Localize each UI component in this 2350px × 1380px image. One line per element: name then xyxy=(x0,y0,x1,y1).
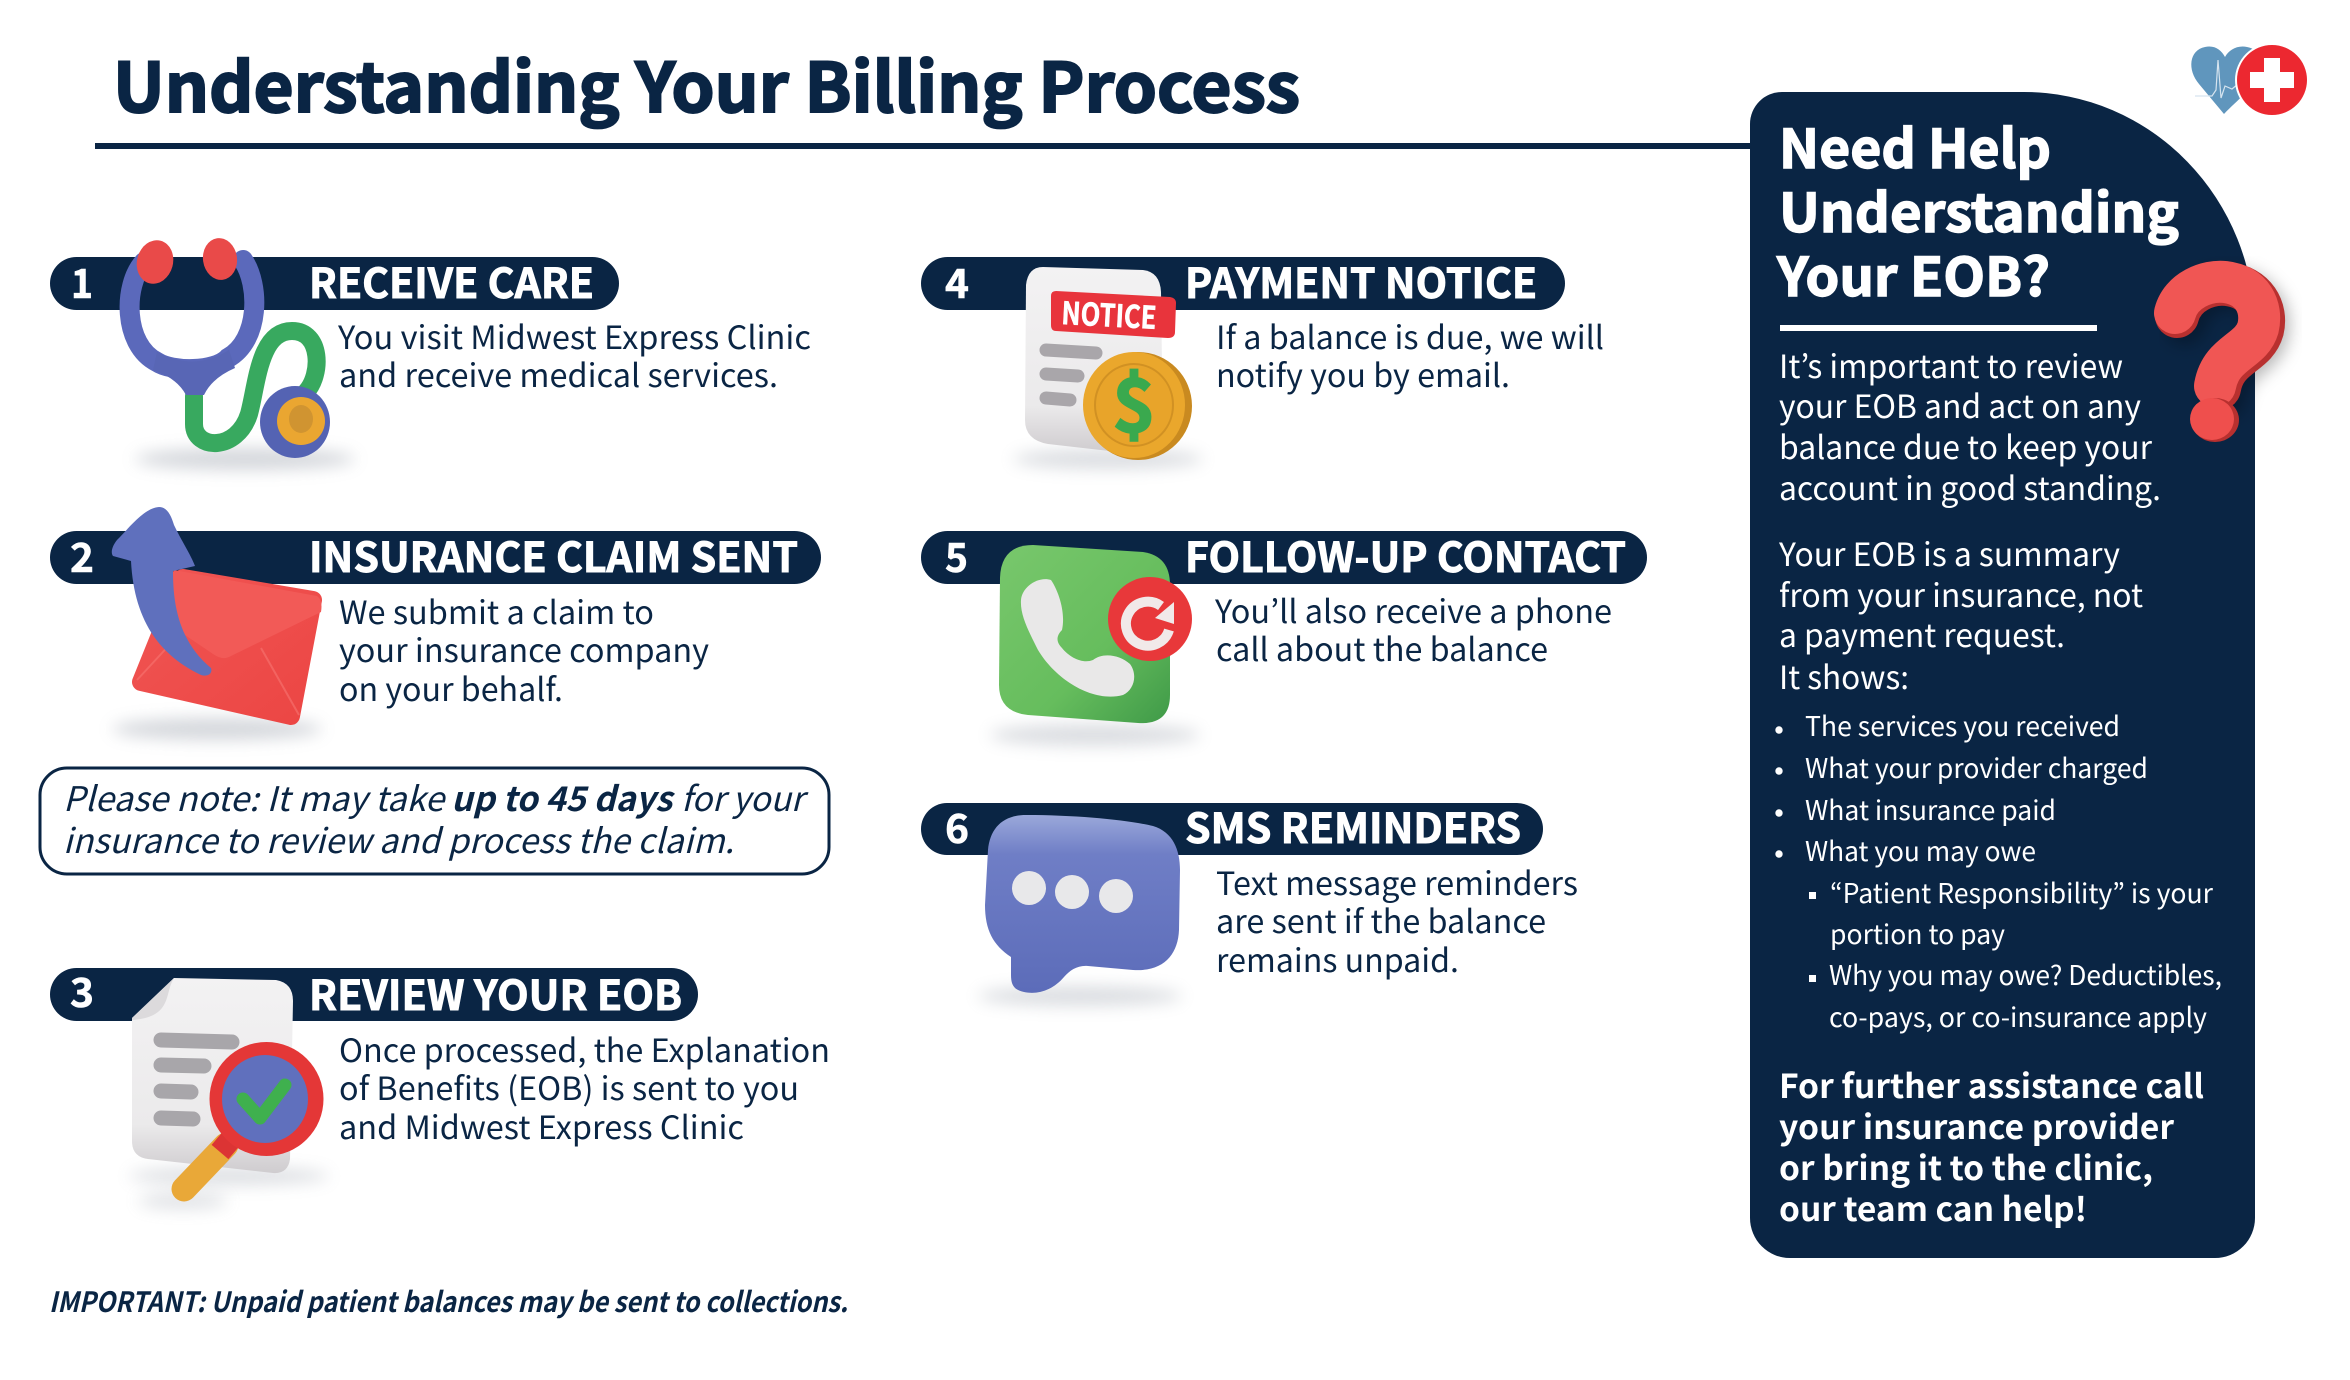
step 5 heading: FOLLOW-UP CONTACT xyxy=(1185,524,1626,584)
panel background xyxy=(1750,92,2255,1258)
step 5 number: 5 xyxy=(945,526,968,584)
step 2: insurance claim sent xyxy=(50,507,821,740)
panel EOB paragraph xyxy=(1778,530,2143,699)
icon: notice with coin: NOTICE xyxy=(1061,288,1158,338)
step 4: payment notice xyxy=(921,250,1604,469)
panel closing call to action: your insurance provider xyxy=(1779,1101,2175,1149)
panel bullet list: What insurance paid xyxy=(1805,789,2056,828)
title rule xyxy=(95,143,1760,149)
step 3: review your eob xyxy=(50,961,830,1209)
panel intro paragraph: balance due to keep your xyxy=(1779,423,2153,469)
panel bullet list: portion to pay xyxy=(1830,913,2005,952)
panel closing call to action xyxy=(1779,1060,2204,1231)
panel heading underline xyxy=(1780,325,2097,331)
step 3 description xyxy=(339,1026,830,1149)
step 2 description: on your behalf. xyxy=(339,665,563,711)
panel bullet list: What you may owe xyxy=(1805,830,2036,869)
panel bullet list: “Patient Responsibility” is your xyxy=(1830,872,2214,911)
step 3 description: of Benefits (EOB) is sent to you xyxy=(339,1064,799,1110)
step 3 heading bar xyxy=(50,968,698,1021)
step 4 description: notify you by email. xyxy=(1216,351,1510,397)
step 2 number: 2 xyxy=(70,526,94,584)
step 2 heading: INSURANCE CLAIM SENT xyxy=(309,524,798,584)
panel EOB paragraph: a payment request. xyxy=(1779,611,2065,657)
step 6 description: remains unpaid. xyxy=(1216,936,1459,982)
step 1 description: You visit Midwest Express Clinic xyxy=(337,313,811,359)
step 6 description: Text message reminders xyxy=(1216,859,1578,905)
panel bullet list: Why you may owe? Deductibles, xyxy=(1829,954,2222,993)
panel closing call to action: For further assistance call xyxy=(1779,1060,2204,1108)
step 3 description: Once processed, the Explanation xyxy=(339,1026,830,1072)
panel heading xyxy=(1776,108,2179,312)
step 4 number: 4 xyxy=(945,252,969,310)
panel intro paragraph: It’s important to review xyxy=(1779,342,2123,388)
callout: please note: Please note: It may take xyxy=(63,772,447,821)
panel heading: Need Help xyxy=(1779,108,2051,184)
step 6 heading bar xyxy=(921,803,1543,855)
icon: stethoscope xyxy=(130,236,355,470)
important note: IMPORTANT: Unpaid patient balances may be sent to collections. xyxy=(49,1281,848,1321)
callout: please note xyxy=(40,768,829,874)
step 3 number: 3 xyxy=(70,961,94,1019)
step 4 description: If a balance is due, we will xyxy=(1216,313,1604,359)
step 3 heading: REVIEW YOUR EOB xyxy=(309,962,682,1022)
callout: please note: for your xyxy=(681,772,809,821)
icon: notice with coin xyxy=(1013,267,1203,469)
step 6: sms reminders xyxy=(921,795,1578,1006)
icon: document with magnifier xyxy=(129,978,329,1209)
step 2 description: your insurance company xyxy=(339,626,709,672)
step 1 number: 1 xyxy=(71,252,93,310)
step 4 heading: PAYMENT NOTICE xyxy=(1185,250,1537,310)
step 4 description xyxy=(1216,313,1604,397)
step 5 heading bar xyxy=(921,531,1647,584)
step 1 description: and receive medical services. xyxy=(339,351,778,397)
icon: envelope with arrow xyxy=(112,507,322,740)
step 2 description xyxy=(339,588,709,711)
step 3 description: and Midwest Express Clinic xyxy=(339,1103,744,1149)
panel EOB paragraph: from your insurance, not xyxy=(1779,571,2143,617)
panel heading: Your EOB? xyxy=(1776,236,2050,312)
step 1 description xyxy=(337,313,811,397)
step 5: follow-up contact xyxy=(921,524,1647,746)
panel bullet list: What your provider charged xyxy=(1805,747,2148,786)
panel EOB paragraph: It shows: xyxy=(1779,653,1909,699)
panel heading: Understanding xyxy=(1779,172,2179,248)
step 4 heading bar xyxy=(921,257,1565,310)
panel EOB paragraph: Your EOB is a summary xyxy=(1778,530,2120,576)
icon: phone with redial badge xyxy=(990,545,1200,746)
icon: chat bubble xyxy=(978,815,1182,1006)
panel: need help understanding your EOB xyxy=(1750,92,2255,1258)
panel closing call to action: our team can help! xyxy=(1779,1183,2087,1231)
step 6 description: are sent if the balance xyxy=(1216,897,1546,943)
icon: notice with coin: $ xyxy=(1112,347,1156,454)
callout: please note: up to 45 days xyxy=(451,772,675,821)
step 1 heading bar xyxy=(50,257,619,310)
step 1 heading: RECEIVE CARE xyxy=(309,250,594,310)
panel intro paragraph: your EOB and act on any xyxy=(1779,382,2141,428)
logo: heart and medical cross xyxy=(2191,43,2309,117)
step 6 heading: SMS REMINDERS xyxy=(1185,795,1521,855)
icon: question mark xyxy=(2175,282,2268,442)
title: Understanding Your Billing Process xyxy=(113,33,1300,132)
panel bullet list: The services you received xyxy=(1805,705,2120,744)
step 5 description xyxy=(1214,587,1612,671)
step 5 description: You’ll also receive a phone xyxy=(1214,587,1612,633)
callout: please note: insurance to review and process the claim. xyxy=(63,814,734,863)
panel bullet list xyxy=(1775,705,2222,1035)
step 1: receive care xyxy=(50,236,811,470)
panel intro paragraph: account in good standing. xyxy=(1779,464,2161,510)
step 2 heading bar xyxy=(50,531,821,584)
panel closing call to action: or bring it to the clinic, xyxy=(1779,1142,2153,1190)
step 5 description: call about the balance xyxy=(1216,625,1548,671)
panel bullet list: co-pays, or co-insurance apply xyxy=(1829,996,2207,1035)
step 2 description: We submit a claim to xyxy=(339,588,654,634)
step 6 description xyxy=(1216,859,1578,982)
panel intro paragraph xyxy=(1779,342,2161,510)
step 6 number: 6 xyxy=(945,797,969,855)
